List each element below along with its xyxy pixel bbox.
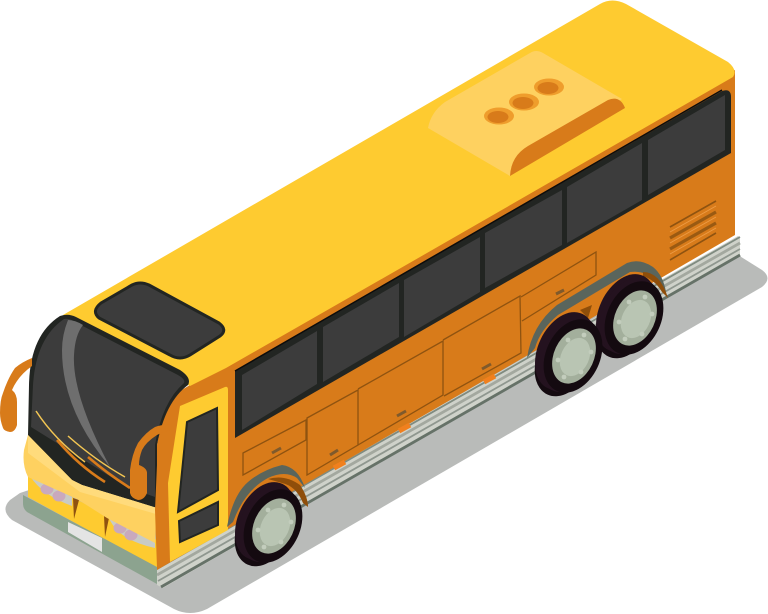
ground shadow: [5, 255, 768, 613]
roof air conditioning unit: [428, 51, 625, 176]
bus side body: [155, 70, 735, 570]
headlights: [30, 476, 155, 548]
rear vent grille: [670, 201, 716, 260]
mirror: left: [0, 358, 32, 432]
rear wheel arch: [527, 261, 668, 358]
mirror: right: [130, 425, 172, 500]
front wheel arch: [227, 465, 308, 527]
lower front panel: [28, 475, 157, 568]
licence plate: [68, 522, 102, 552]
side windows: [235, 90, 731, 438]
panel handles: [272, 290, 564, 455]
side skirt: [157, 236, 740, 588]
wheel: middle rear: [584, 264, 675, 368]
wheel: rear axle front: [523, 302, 614, 406]
roof: [63, 0, 735, 386]
roof hatch: [95, 283, 224, 358]
bumper: [23, 495, 157, 584]
wheel: front: [223, 472, 314, 576]
orange marker lights: [334, 376, 495, 468]
door: [168, 387, 228, 562]
luggage panels: [243, 252, 596, 475]
A-pillar: [155, 408, 180, 568]
front grille notches: [73, 498, 109, 537]
windshield: [28, 315, 189, 508]
yellow front fascia: [24, 435, 157, 543]
